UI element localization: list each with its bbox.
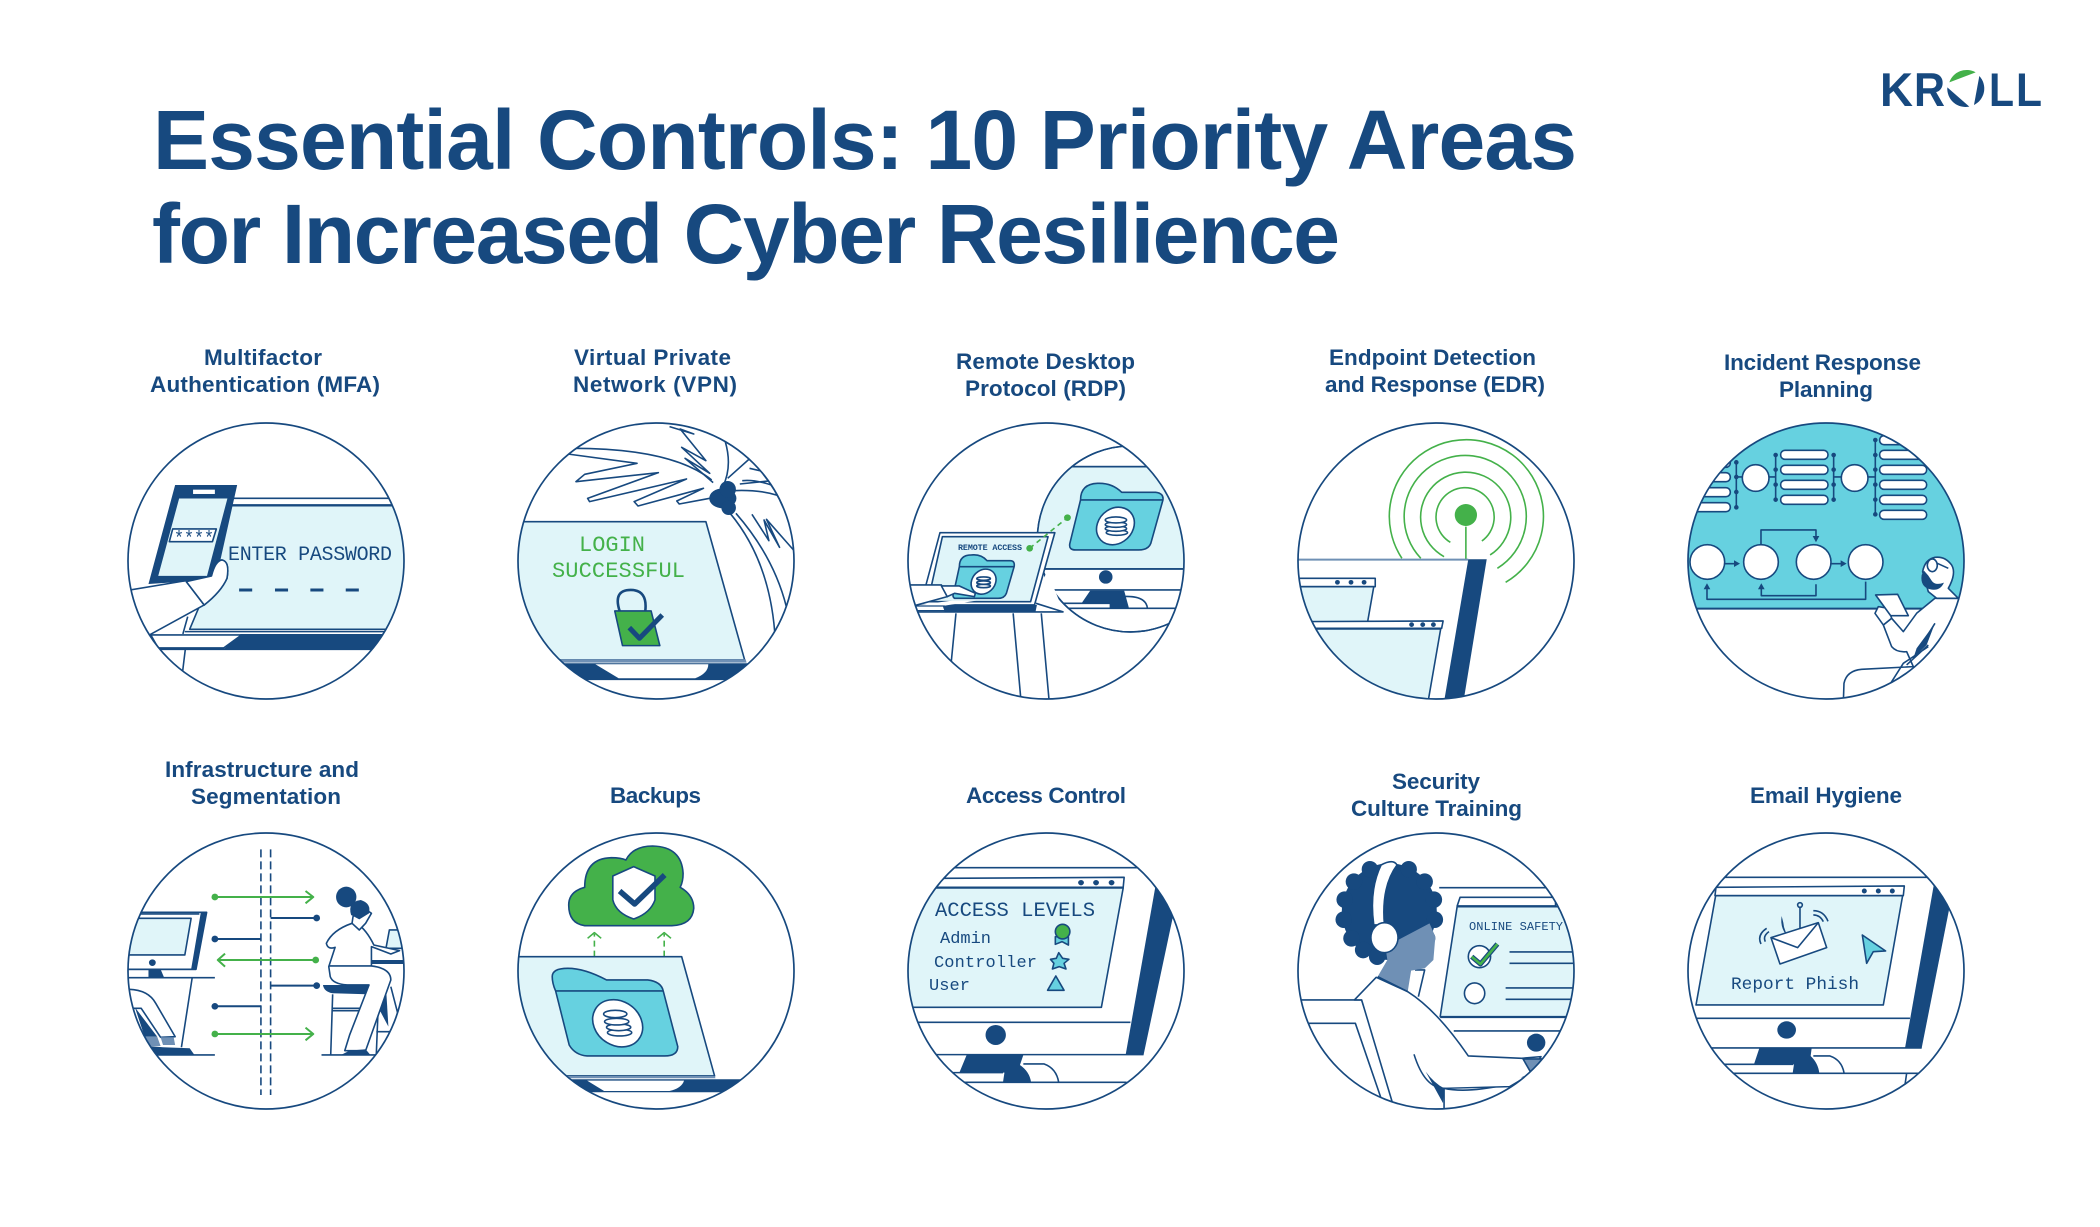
heading: RDP: Protocol (RDP) <box>965 376 1126 401</box>
heading: access control: Access Control <box>966 783 1126 808</box>
logo: Kroll: L <box>1989 63 2014 116</box>
screen text: report phish: Report Phish <box>1731 975 1859 995</box>
illustration: security culture <box>1294 833 1582 1113</box>
heading: security culture <box>1351 769 1522 821</box>
panel: infrastructure and segmentation <box>124 757 410 1109</box>
screen text: online safety: ONLINE SAFETY <box>1469 920 1563 934</box>
panel: backups <box>510 783 794 1109</box>
icon: cloud with shield <box>569 846 694 926</box>
arrows: upload <box>587 932 672 956</box>
heading: VPN: Network (VPN) <box>573 372 737 397</box>
screen text: enter password: ENTER PASSWORD <box>228 544 392 567</box>
illustration: access control <box>899 833 1184 1109</box>
heading: VPN: Virtual Private <box>574 345 731 370</box>
logo: Kroll: K <box>1880 63 1913 116</box>
icon: folder with database <box>552 968 678 1056</box>
figure: right worker <box>322 887 410 1055</box>
title: Essential Controls: 10 Priority Areas <box>153 93 1577 187</box>
illustration: incident response <box>1687 422 1965 700</box>
illustration: VPN <box>507 423 794 699</box>
heading: segmentation: Infrastructure and <box>165 757 359 782</box>
figure: chair <box>1302 999 1382 1097</box>
heading: RDP: Remote Desktop <box>956 349 1135 374</box>
screen text: access levels: Admin <box>940 930 991 949</box>
heading: incident response: Planning <box>1779 377 1873 402</box>
icon: padlock <box>615 590 662 646</box>
arrows: network connections <box>211 891 320 1040</box>
icon: completed check <box>1468 944 1497 968</box>
logo: Kroll: L <box>2016 63 2042 116</box>
heading: EDR <box>1325 345 1545 397</box>
icon: small folder <box>953 555 1014 598</box>
icon: phishing envelope <box>1760 903 1828 964</box>
panel: email hygiene <box>1688 783 1964 1109</box>
icon: folder <box>1070 483 1163 550</box>
icon: empty check <box>1464 983 1485 1004</box>
logo: Kroll: R <box>1914 63 1945 116</box>
screen text: remote access: REMOTE ACCESS <box>958 543 1022 553</box>
window: lower <box>1312 620 1444 698</box>
illustration: email hygiene <box>1688 833 1964 1109</box>
monitor stand <box>1523 1059 1543 1073</box>
panel: security culture training <box>1294 769 1582 1113</box>
figure: man with tablet <box>1842 556 1958 698</box>
heading: MFA <box>150 345 380 397</box>
window: upper <box>1294 578 1375 623</box>
icon: signal rings <box>1389 440 1543 582</box>
flow chart: top lists <box>1670 436 1927 519</box>
screen text: login successful <box>552 533 685 584</box>
illustration: backups <box>510 833 794 1109</box>
screen text: access levels <box>929 900 1095 996</box>
panel: multifactor authentication <box>124 345 410 699</box>
heading: incident response: Incident Response <box>1724 350 1921 375</box>
heading: email hygiene: Email Hygiene <box>1750 783 1902 808</box>
heading: segmentation: Segmentation <box>191 784 341 809</box>
panel: endpoint detection and response <box>1291 345 1574 702</box>
panel: access control <box>899 783 1184 1109</box>
heading: EDR: Endpoint Detection <box>1329 345 1536 370</box>
illustration: segmentation <box>124 833 410 1109</box>
screen text: login successful: SUCCESSFUL <box>552 559 685 584</box>
flow chart: process loop <box>1690 530 1883 599</box>
heading: MFA: Multifactor <box>204 345 322 370</box>
heading: RDP <box>956 349 1135 401</box>
heading: segmentation <box>165 757 359 809</box>
heading: MFA: Authentication (MFA) <box>150 372 380 397</box>
screen text: enter password <box>174 528 392 567</box>
icon: star <box>1050 953 1069 969</box>
heading: incident response <box>1724 350 1921 402</box>
screen text: login successful: LOGIN <box>579 533 645 558</box>
screen text: access levels: User <box>929 977 970 996</box>
icon: triangle <box>1048 976 1064 990</box>
panel: incident response planning <box>1687 354 1965 700</box>
figure: person with headset <box>1335 861 1541 1113</box>
icon: ribbon <box>1055 924 1070 945</box>
divider: dashed segmentation lines <box>261 849 271 1095</box>
panel: remote desktop protocol <box>907 353 1185 700</box>
heading: backups: Backups <box>610 783 701 808</box>
screen text: access levels: ACCESS LEVELS <box>935 900 1095 923</box>
heading: security culture: Security <box>1392 769 1480 794</box>
heading: security culture: Culture Training <box>1351 796 1522 821</box>
title: for Increased Cyber Resilience <box>152 187 1340 281</box>
illustration: MFA <box>124 423 410 699</box>
illustration: RDP <box>907 422 1185 700</box>
heading: EDR: and Response (EDR) <box>1325 372 1545 397</box>
heading: VPN <box>573 345 737 397</box>
screen text: enter password: **** <box>174 528 214 550</box>
illustration: EDR <box>1291 423 1574 702</box>
icon: cursor <box>1862 935 1886 963</box>
screen text: access levels: Controller <box>934 954 1037 973</box>
panel: virtual private network <box>507 345 794 699</box>
figure: left workstation <box>124 912 215 1055</box>
logo: Kroll <box>1880 63 2042 116</box>
title <box>152 93 1577 281</box>
